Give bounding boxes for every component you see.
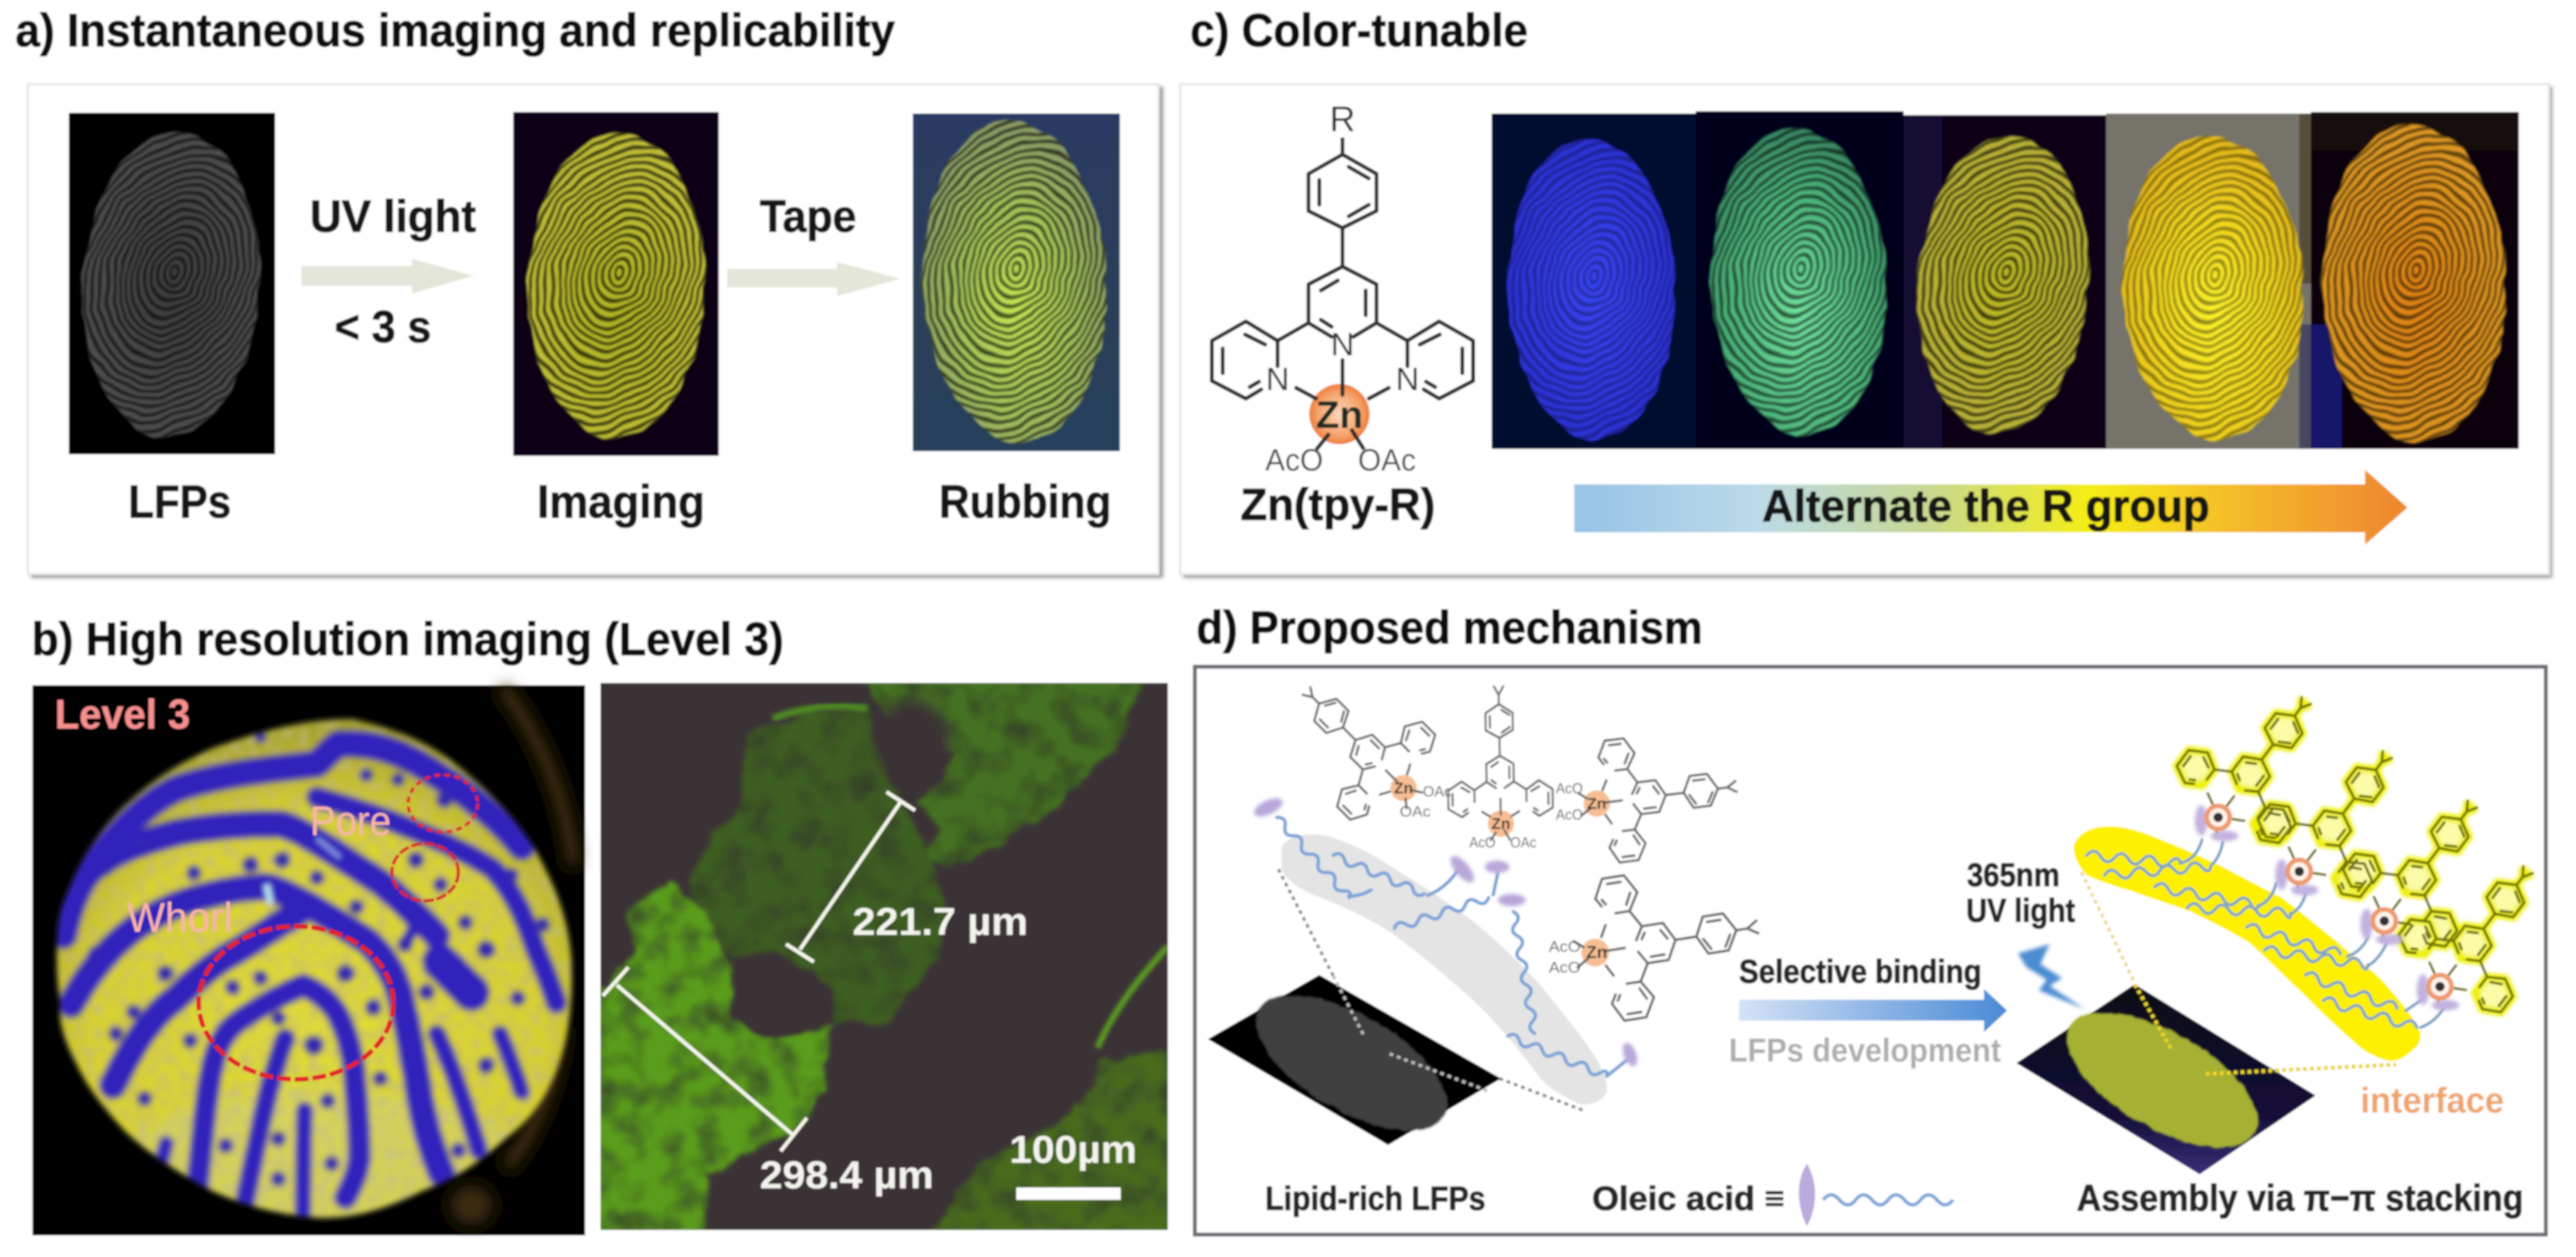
molecule: Zn complex 3: Zn: [1587, 796, 1606, 813]
label: lipid-rich LFPs: Lipid-rich LFPs: [1265, 1180, 1485, 1218]
structure: Zn(tpy-R) complex: N: [1396, 361, 1419, 397]
red dashed circle: pore 2: [392, 844, 458, 901]
molecule: Zn complex 1: Zn: [1394, 780, 1413, 797]
label: assembly via pi-pi stacking: Assembly via π−π stacking: [2077, 1178, 2523, 1219]
label: alternate the R group: Alternate the R group: [1762, 481, 2210, 532]
label: Pore: Pore: [310, 798, 391, 844]
fatty acid chains on band: [2086, 840, 2445, 1031]
label: 298.4 um: 298.4 µm: [760, 1153, 934, 1197]
structure: Zn(tpy-R) complex: N: [1266, 361, 1289, 397]
label: Whorl: Whorl: [127, 895, 233, 941]
red dashed circle: pore 1: [408, 775, 478, 832]
pores: [89, 732, 550, 1186]
molecule: Zn complex 2: AcO: [1469, 835, 1496, 851]
structure: Zn(tpy-R) complex: [1212, 99, 1473, 477]
LFP card: [1208, 968, 1501, 1158]
image: yellow fingerprint: [2106, 114, 2311, 449]
label: 365nm UV light: UV light: [1966, 892, 2075, 929]
yellow dotted guide lines: [2081, 872, 2135, 983]
measure line: 221.7 um: [786, 792, 915, 962]
arrow: tape step: [727, 262, 900, 296]
structure: Zn(tpy-R) complex: N: [1331, 326, 1354, 362]
ridge bands: [84, 744, 522, 878]
molecule: Zn complex 1: OAc: [1423, 784, 1451, 800]
molecule: Zn complex 1: [1264, 648, 1458, 842]
label: oleic acid: Oleic acid ≡: [1592, 1180, 1785, 1218]
structure: Zn(tpy-R) complex: R: [1329, 99, 1356, 139]
oleic acid chains: [1274, 815, 1627, 1079]
label: LFPs development: LFPs development: [1729, 1032, 2001, 1069]
heading: panel c: c) Color-tunable: [1190, 5, 1528, 56]
red dashed circle: whorl: [199, 926, 393, 1079]
panel b: high resolution imaging: [32, 672, 1183, 1244]
image: high magnification ridge micrograph: [587, 672, 1183, 1244]
label: 365nm UV light: 365nm: [1967, 857, 2060, 894]
label: Tape: Tape: [760, 192, 856, 242]
label: Level 3: Level 3: [55, 691, 190, 738]
molecule: Zn complex 4: [1549, 856, 1768, 1027]
molecule: Zn complex 1: OAc: [1400, 804, 1431, 820]
structure: Zn(tpy-R) complex: OAc: [1358, 443, 1416, 477]
image: olive fingerprint: [1904, 115, 2106, 449]
molecule: Zn complex 4: AcO: [1549, 960, 1581, 977]
arrow: selective binding: [1739, 989, 2007, 1032]
image: green fingerprint: [1696, 111, 1904, 449]
molecule: Zn complex 4: AcO: [1549, 939, 1581, 956]
image: orange fingerprint: [2311, 112, 2519, 449]
image: rubbing fingerprint: [913, 114, 1120, 451]
image: latent fingerprint LFPs: [69, 113, 275, 454]
image: imaging fingerprint: [513, 112, 719, 456]
assembled molecules with yellow glow: [2156, 662, 2576, 1039]
label: Zn(tpy-R): Zn(tpy-R): [1240, 480, 1435, 530]
structure: Zn(tpy-R) complex: Zn: [1315, 393, 1363, 437]
zinc centres with bound heads: [2195, 805, 2459, 1011]
scale bar: [1016, 1187, 1121, 1200]
panel d: proposed mechanism: [1195, 648, 2576, 1235]
heading: panel a: a) Instantaneous imaging and replicability: [15, 5, 896, 56]
dotted guide lines: [1278, 869, 1583, 1110]
panel c: color-tunable: [1180, 84, 2552, 578]
label: LFPs: LFPs: [128, 476, 231, 528]
label: selective binding: Selective binding: [1739, 953, 1982, 990]
molecule: Zn complex 3: AcO: [1556, 781, 1583, 797]
image: level 3 fingerprint micrograph: [32, 685, 587, 1235]
icon: oleic acid legend: [1798, 1164, 1953, 1226]
lipid band: [1281, 834, 1607, 1105]
molecule: Zn complex 2: Zn: [1492, 816, 1510, 833]
structure: Zn(tpy-R) complex: AcO: [1265, 443, 1323, 477]
molecule: Zn complex 4: Zn: [1587, 943, 1607, 962]
heading: panel d: d) Proposed mechanism: [1196, 602, 1703, 654]
label: under 3 s: < 3 s: [335, 302, 431, 352]
molecule: Zn complex 3: [1556, 725, 1744, 866]
arrow: alternate the R group: [1574, 470, 2408, 545]
icon: lightning bolt: [2018, 944, 2084, 1009]
label: interface: interface: [2360, 1080, 2504, 1120]
glow: [2172, 662, 2576, 1019]
label: 221.7 um: 221.7 µm: [852, 900, 1028, 943]
label: Rubbing: Rubbing: [939, 476, 1111, 528]
image: blue fingerprint: [1492, 114, 1696, 449]
label: UV light: UV light: [310, 192, 476, 242]
panel a: instantaneous imaging and replicability: [28, 84, 1163, 578]
label: Imaging: Imaging: [537, 476, 705, 528]
label: scale 100 um: 100µm: [1009, 1128, 1137, 1171]
heading: panel b: b) High resolution imaging (Level 3): [32, 613, 784, 665]
arrow: UV light step: [301, 259, 474, 294]
molecule: Zn complex 2: OAc: [1510, 835, 1536, 851]
yellow lipid band: [2074, 827, 2421, 1061]
green regions: [587, 672, 1183, 1244]
molecule: Zn complex 3: AcO: [1556, 807, 1583, 824]
measure line: 298.4 um: [603, 967, 807, 1151]
label: 365nm UV light: [1966, 857, 2075, 929]
fluorescent card: [2016, 984, 2316, 1175]
oleic acid heads: [1251, 794, 1640, 1068]
molecule: Zn complex 2: [1446, 685, 1553, 851]
